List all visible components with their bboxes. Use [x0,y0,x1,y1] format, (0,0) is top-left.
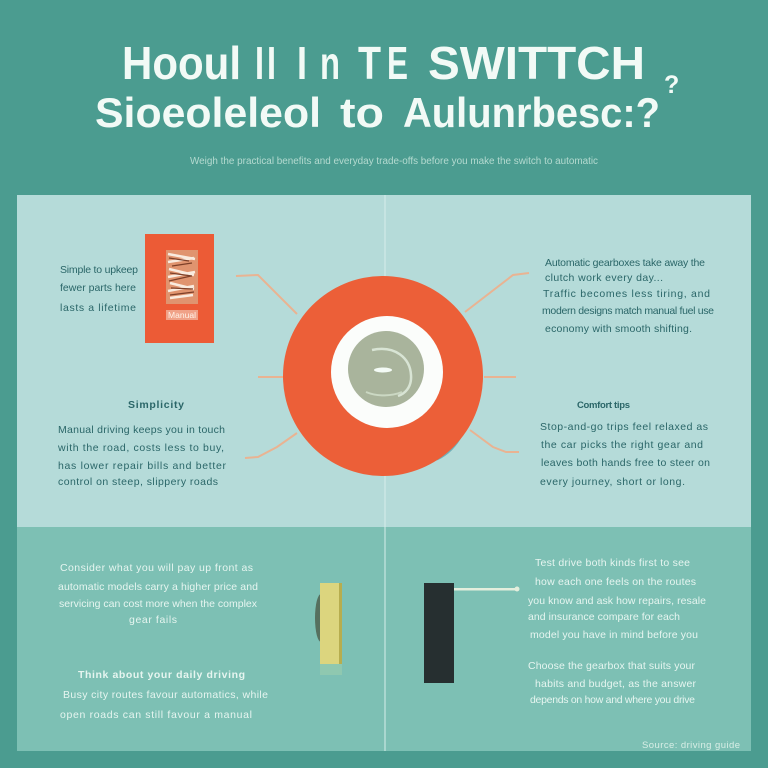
icon: central dial [283,276,483,476]
panel: upper comparison [17,195,751,527]
heading: left benefit: Simplicity [128,399,184,411]
title: E [387,37,408,89]
text block: lower right upper: and insurance compare for each [528,611,680,623]
centre divider [384,195,386,751]
heading: right benefit: Comfort tips [577,400,630,411]
text block: upper right note: clutch work every day... [545,272,663,284]
text block: right benefit [540,421,710,488]
connector rays [236,273,529,458]
title: T [358,37,381,89]
panel: upper left note: fewer parts here [60,282,136,294]
text block: lower left cost: gear fails [129,614,177,626]
title: I [255,37,264,89]
text block: lower right lower: Choose the gearbox that suits your [528,660,696,672]
text block: lower left advice: Busy city routes favour automatics, while [63,689,268,701]
title: SWITTCH [428,37,645,89]
text block: lower right upper: Test drive both kinds first to see [535,557,690,569]
text block: lower right lower: habits and budget, as the answer [535,678,696,690]
text block: right benefit: the car picks the right gear and [541,439,703,451]
panel: lower comparison [17,527,751,751]
text block: left benefit: has lower repair bills and better [58,460,226,472]
text block: lower left cost: servicing can cost more when the complex [59,598,258,610]
icon: red product card: Manual [168,311,196,320]
text block: lower left cost: automatic models carry a higher price and [58,581,258,593]
icon: red product card [145,234,214,343]
icon: yellow device [315,583,342,675]
panel: upper left note: Simple to upkeep [60,264,138,276]
text block: upper right note [542,257,714,335]
icon: black device with pointer [424,583,520,683]
title: I [297,37,307,89]
text block: upper right note: Traffic becomes less tiring, and [543,288,710,300]
title: Sioeoleleol [95,89,321,136]
title: to [340,89,384,136]
text block: left benefit: control on steep, slippery roads [58,476,218,488]
title: I [267,37,276,89]
text block: upper right note: economy with smooth shifting. [545,323,692,335]
text block: lower right upper [528,557,706,641]
text block: lower right upper: you know and ask how repairs, resale [528,595,706,607]
text block: left benefit: Manual driving keeps you in touch [58,424,225,436]
subtitle: Weigh the practical benefits and everyday trade-offs before you make the switch to automatic [190,156,598,167]
text block: left benefit: with the road, costs less to buy, [57,442,224,454]
title: Aulunrbesc:? [403,89,660,136]
text block: lower right upper: model you have in mind before you [530,629,698,641]
title: n [320,37,340,89]
text block: upper right note: Automatic gearboxes take away the [545,257,705,269]
heading: lower left: Think about your daily driving [78,669,245,681]
text block: right benefit: Stop-and-go trips feel relaxed as [540,421,708,433]
text block: right benefit: leaves both hands free to steer on [541,457,710,469]
text block: lower right upper: how each one feels on the routes [535,576,696,588]
text block: upper right note: modern designs match manual fuel use [542,305,714,317]
text block: lower left advice [60,689,268,721]
text block: right benefit: every journey, short or long. [540,476,685,488]
text block: lower left advice: open roads can still favour a manual [60,709,252,721]
panel: upper left note [60,264,138,314]
text block: lower left cost [58,562,258,626]
text block: left benefit [57,424,226,488]
text block: lower right lower [528,660,696,706]
title: Hooul [122,37,241,89]
panel: upper left note: lasts a lifetime [60,302,136,314]
title [95,37,679,136]
footer note: Source: driving guide [642,740,740,751]
text block: lower left cost: Consider what you will pay up front as [60,562,253,574]
title: ? [664,71,679,99]
text block: lower right lower: depends on how and where you drive [530,694,695,706]
